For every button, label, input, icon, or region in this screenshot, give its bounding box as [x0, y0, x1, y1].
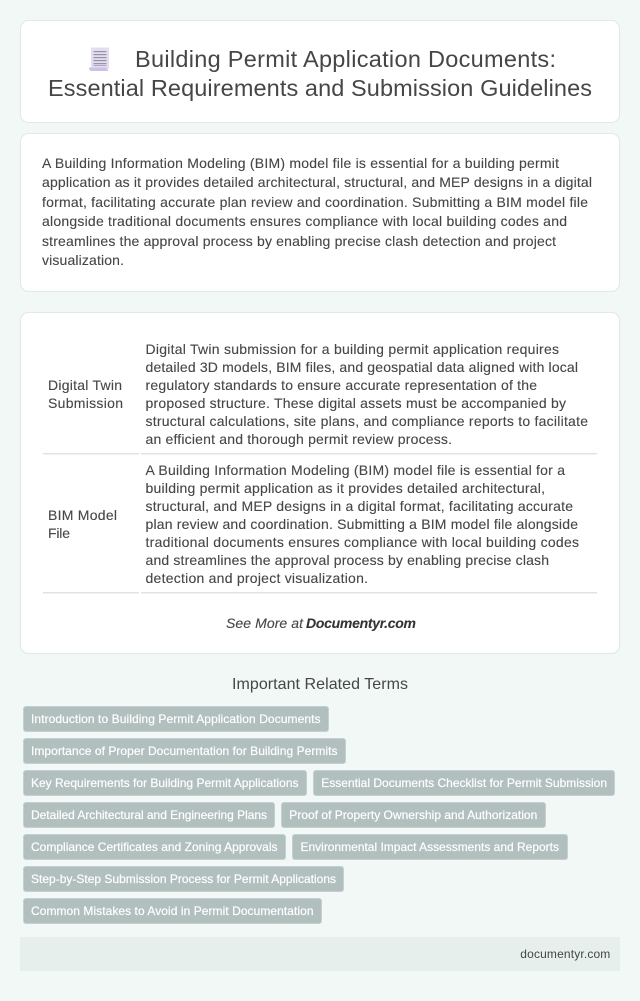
- tag: [24, 770, 306, 796]
- tag: [24, 898, 322, 924]
- row label: Digital Twin Submission: Digital Twin: [48, 377, 122, 393]
- row text: BIM Model File: traditional documents ensures compliance with local building codes: [146, 534, 579, 550]
- intro text block: [42, 155, 592, 268]
- tag: Common Mistakes to Avoid in Permit Documentation: [31, 904, 314, 918]
- row text: BIM Model File: structural, and MEP designs in a digital format, facilitating accurate: [146, 498, 573, 514]
- intro text block: alongside traditional documents ensures compliance with local building codes and: [42, 213, 567, 229]
- panel: document table: [20, 312, 620, 654]
- row text: Digital Twin Submission: regulatory standards to ensure accurate representation of the: [146, 377, 537, 393]
- footer bar: documentyr.com: [520, 947, 610, 961]
- title: Building Permit Application Documents:: [135, 46, 556, 72]
- tag: Key Requirements for Building Permit Applications: [31, 776, 298, 790]
- panel: introduction: [20, 134, 620, 292]
- icon: receipt document: [89, 48, 109, 71]
- tag: Essential Documents Checklist for Permit Submission: [321, 776, 607, 790]
- intro text block: application as it provides detailed architectural, structural, and MEP designs in a digital: [42, 174, 592, 190]
- tag: [282, 802, 546, 828]
- tag: Compliance Certificates and Zoning Approvals: [31, 840, 278, 854]
- row text: Digital Twin Submission: Digital Twin submission for a building permit application requires: [146, 341, 559, 357]
- tag: [24, 866, 344, 892]
- row text: BIM Model File: detection and project visualization.: [146, 570, 368, 586]
- tag: Importance of Proper Documentation for Building Permits: [31, 744, 338, 758]
- row text: BIM Model File: plan review and coordination. Submitting a BIM model file alongside: [146, 516, 578, 532]
- row label: BIM Model File: File: [48, 525, 70, 541]
- intro text block: A Building Information Modeling (BIM) model file is essential for a building permit: [42, 155, 559, 171]
- intro text block: streamlines the approval process by enabling precise clash detection and project: [42, 233, 556, 249]
- row label: BIM Model File: [48, 507, 117, 541]
- row text: BIM Model File: building permit application as it provides detailed architectural,: [146, 480, 545, 496]
- tag: Introduction to Building Permit Application Documents: [31, 712, 320, 726]
- row text: Digital Twin Submission: proposed structure. These digital assets must be accompanied by: [146, 395, 566, 411]
- row label: BIM Model File: BIM Model: [48, 507, 117, 523]
- row label: Digital Twin Submission: Submission: [48, 395, 123, 411]
- row label: Digital Twin Submission: [48, 377, 123, 411]
- row text: Digital Twin Submission: [146, 341, 588, 447]
- tag: [24, 802, 274, 828]
- tag: [314, 770, 614, 796]
- see more link: Documentyr.com: [306, 615, 416, 631]
- row text: BIM Model File: [146, 462, 579, 586]
- title: Essential Requirements and Submission Guidelines: [48, 75, 592, 101]
- tag list: [24, 706, 614, 924]
- tag: [24, 834, 286, 860]
- row text: BIM Model File: A Building Information Modeling (BIM) model file is essential for a: [146, 462, 565, 478]
- see more link: [226, 615, 416, 631]
- tag: [24, 706, 328, 732]
- row text: Digital Twin Submission: detailed 3D models, BIM files, and geospatial data aligned with local: [146, 359, 578, 375]
- footer bar: [20, 937, 620, 971]
- tag: [292, 834, 568, 860]
- row text: BIM Model File: and streamlines the approval process by enabling precise clash: [146, 552, 549, 568]
- tag: Environmental Impact Assessments and Reports: [300, 840, 559, 854]
- intro text block: format, facilitating accurate plan review and coordination. Submitting a BIM model file: [42, 194, 588, 210]
- intro text block: visualization.: [42, 252, 124, 268]
- panel: title card: [20, 20, 620, 122]
- tag: [24, 738, 346, 764]
- row text: Digital Twin Submission: an efficient and thorough permit review process.: [146, 431, 452, 447]
- see more link: See More at: [226, 615, 304, 631]
- tag: Step-by-Step Submission Process for Permit Applications: [31, 872, 336, 886]
- tag: Proof of Property Ownership and Authorization: [289, 808, 537, 822]
- tag: Detailed Architectural and Engineering Plans: [31, 808, 267, 822]
- title: [48, 46, 592, 101]
- heading: important related terms: Important Related Terms: [232, 676, 408, 693]
- row text: Digital Twin Submission: structural calculations, site plans, and compliance reports to facilitate: [146, 413, 588, 429]
